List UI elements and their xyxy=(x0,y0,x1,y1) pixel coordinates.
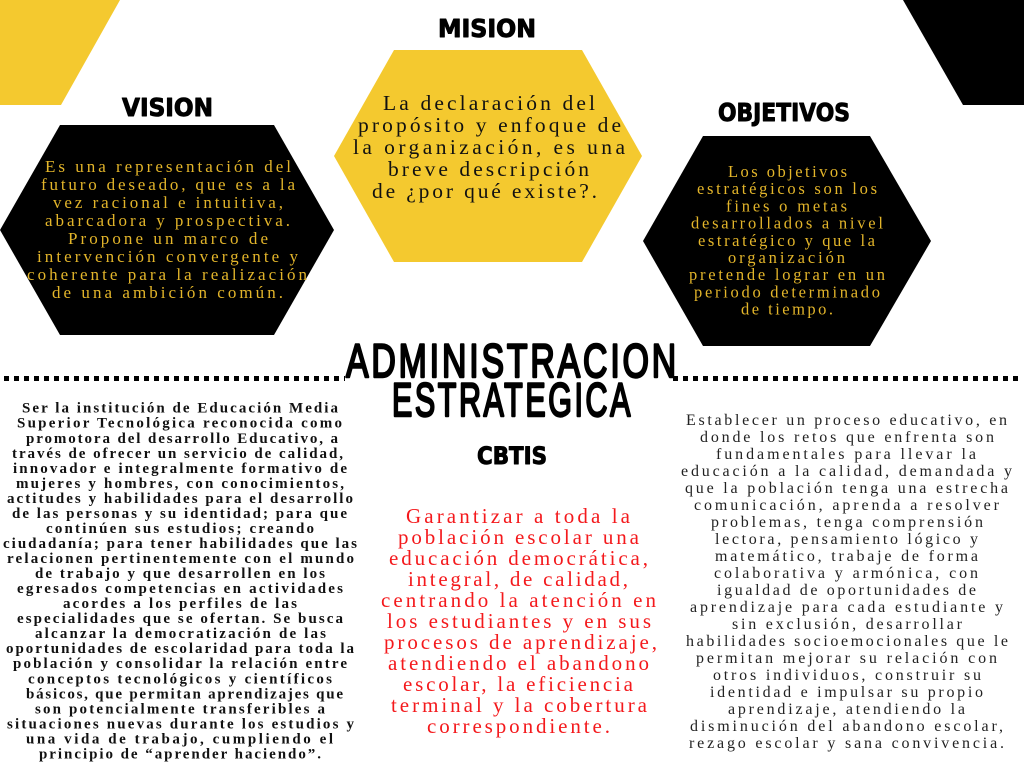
text: right column: identidad e impulsar su propio xyxy=(710,684,983,701)
text: red centre statement: población escolar una xyxy=(398,525,640,549)
text: right column: educación a la calidad, demandada y xyxy=(681,463,1012,480)
text: left column: ciudadanía; para tener habilidades que las xyxy=(3,536,357,552)
text: left column: de trabajo y que desarrollen en los xyxy=(35,566,325,582)
text: vision description: Es una representación del xyxy=(45,157,291,176)
text: right column: que la población tenga una estrecha xyxy=(685,480,1008,497)
text: right column: comunicación, aprenda a resolver xyxy=(694,497,1000,514)
text: objetivos description: organización xyxy=(728,248,845,267)
text: objetivos description: desarrollados a nivel xyxy=(691,214,883,233)
decorative corner: yellow hexagon fragment xyxy=(0,0,120,105)
text: left column: continúen sus estudios; creando xyxy=(46,521,314,537)
text: vision description: Propone un marco de xyxy=(68,229,268,248)
text: right column: rezago escolar y sana convivencia. xyxy=(689,735,1004,752)
text: left column xyxy=(3,401,357,762)
text: left column: innovador e integralmente formativo de xyxy=(13,461,347,477)
text: vision description: de una ambición común. xyxy=(52,283,283,302)
panel: objetivos xyxy=(643,98,931,346)
text: right column: permitan mejorar su relación con xyxy=(696,650,997,667)
title: ADMINISTRACION xyxy=(346,334,679,387)
decorative corner: black hexagon fragment xyxy=(903,0,1024,105)
text: right column: problemas, tenga comprensión xyxy=(711,514,983,531)
text: objetivos description: pretende lograr en un xyxy=(689,265,885,284)
text: objetivos description: de tiempo. xyxy=(741,300,833,319)
text: left column: situaciones nuevas durante los estudios y xyxy=(7,716,354,732)
text: red centre statement: Garantizar a toda la xyxy=(406,504,631,528)
text: objetivos description: Los objetivos xyxy=(728,162,847,181)
dotted line right xyxy=(673,376,1018,381)
text: left column: oportunidades de escolaridad para toda la xyxy=(6,641,354,657)
text: vision description: vez racional e intuitiva, xyxy=(53,193,283,212)
text: right column: igualdad de oportunidades de xyxy=(717,582,976,599)
heading: vision: VISION xyxy=(122,93,213,122)
text: red centre statement: procesos de aprendizaje, xyxy=(384,630,657,654)
text: left column: una vida de trabajo, cumpliendo el xyxy=(26,731,333,747)
text: vision description: coherente para la realización xyxy=(27,265,308,284)
text: left column: través de ofrecer un servicio de calidad, xyxy=(12,446,343,462)
text: left column: básicos, que permitan aprendizajes que xyxy=(26,686,343,702)
hexagon: mision xyxy=(334,50,642,262)
text: right column: fundamentales para llevar la xyxy=(716,446,976,463)
text: red centre statement: atendiendo el abandono xyxy=(388,651,649,675)
text: left column: conceptos tecnológicos y científicos xyxy=(28,671,332,687)
text: red centre statement: escolar, la eficiencia xyxy=(403,672,634,696)
text: mision description: La declaración del xyxy=(383,91,595,115)
text: red centre statement: correspondiente. xyxy=(427,714,610,738)
heading: cbtis: CBTIS xyxy=(477,442,547,470)
text: objetivos description: estratégicos son los xyxy=(697,179,877,198)
text: left column: egresados competencias en actividades xyxy=(17,581,343,597)
text: vision description: intervención convergente y xyxy=(37,247,298,266)
text: right column: aprendizaje para cada estudiante y xyxy=(690,599,1003,616)
text: vision description: abarcadora y prospectiva. xyxy=(45,211,290,230)
text: left column: promotora del desarrollo Educativo, a xyxy=(26,431,338,447)
text: red centre statement xyxy=(381,504,657,738)
text: right column: lectora, pensamiento lógico y xyxy=(715,531,978,548)
text: mision description: la organización, es una xyxy=(353,135,625,159)
text: right column xyxy=(681,412,1012,752)
text: objetivos description: fines o metas xyxy=(726,196,847,215)
text: red centre statement: integral, de calidad, xyxy=(408,567,628,591)
text: right column: donde los retos que enfrenta son xyxy=(700,429,994,446)
text: left column: relacionen pertinentemente con el mundo xyxy=(7,551,354,567)
text: right column: aprendizaje, atendiendo la xyxy=(728,701,965,718)
text: vision description xyxy=(27,157,308,302)
dotted line left xyxy=(4,376,345,381)
panel: cbtis xyxy=(381,442,657,738)
text: left column: son potencialmente transferibles a xyxy=(35,701,326,717)
text: red centre statement: los estudiantes y en sus xyxy=(387,609,651,633)
text: left column: población y consolidar la relación entre xyxy=(13,656,347,672)
heading: mision: MISION xyxy=(438,14,536,43)
text: left column: actitudes y habilidades para el desarrollo xyxy=(7,491,353,507)
panel: mision xyxy=(334,14,642,262)
text: red centre statement: centrando la atención en xyxy=(381,588,656,612)
text: left column: especialidades que se ofertan. Se busca xyxy=(17,611,344,627)
text: red centre statement: educación democrática, xyxy=(389,546,648,570)
text: right column: otros individuos, construir su xyxy=(713,667,981,684)
title: ESTRATEGICA xyxy=(392,373,633,426)
panel: vision xyxy=(0,93,334,335)
text: right column: matemático, trabaje de forma xyxy=(715,548,978,565)
text: mision description: de ¿por qué existe?. xyxy=(372,179,597,203)
hexagon: vision xyxy=(0,125,334,335)
heading: objetivos: OBJETIVOS xyxy=(718,98,850,127)
text: vision description: futuro deseado, que es a la xyxy=(41,175,295,194)
text: objetivos description: estratégico y que la xyxy=(698,231,876,250)
title xyxy=(346,334,679,426)
text: right column: colaborativa y armónica, con xyxy=(714,565,978,582)
text: left column: de las personas y su identidad; para que xyxy=(12,506,347,522)
text: left column: alcanzar la democratización de las xyxy=(35,626,326,642)
text: mision description: propósito y enfoque de xyxy=(358,113,621,137)
text: right column: disminución del abandono escolar, xyxy=(690,718,1003,735)
text: left column: mujeres y hombres, con conocimientos, xyxy=(16,476,344,492)
text: objetivos description xyxy=(689,162,885,319)
hexagon: objetivos xyxy=(643,136,931,346)
text: right column: sin exclusión, desarrollar xyxy=(732,616,963,633)
text: right column: habilidades socioemocionales que le xyxy=(686,633,1008,650)
text: left column: acordes a los perfiles de las xyxy=(63,596,297,612)
text: left column: Superior Tecnológica reconocida como xyxy=(17,416,342,432)
text: mision description: breve descripción xyxy=(388,157,589,181)
text: left column: principio de “aprender haciendo”. xyxy=(39,746,321,762)
text: mision description xyxy=(353,91,625,203)
text: red centre statement: terminal y la cobertura xyxy=(391,693,648,717)
text: left column: Ser la institución de Educación Media xyxy=(22,401,338,417)
text: objetivos description: periodo determinado xyxy=(694,282,880,301)
text: right column: Establecer un proceso educativo, en xyxy=(686,412,1007,429)
